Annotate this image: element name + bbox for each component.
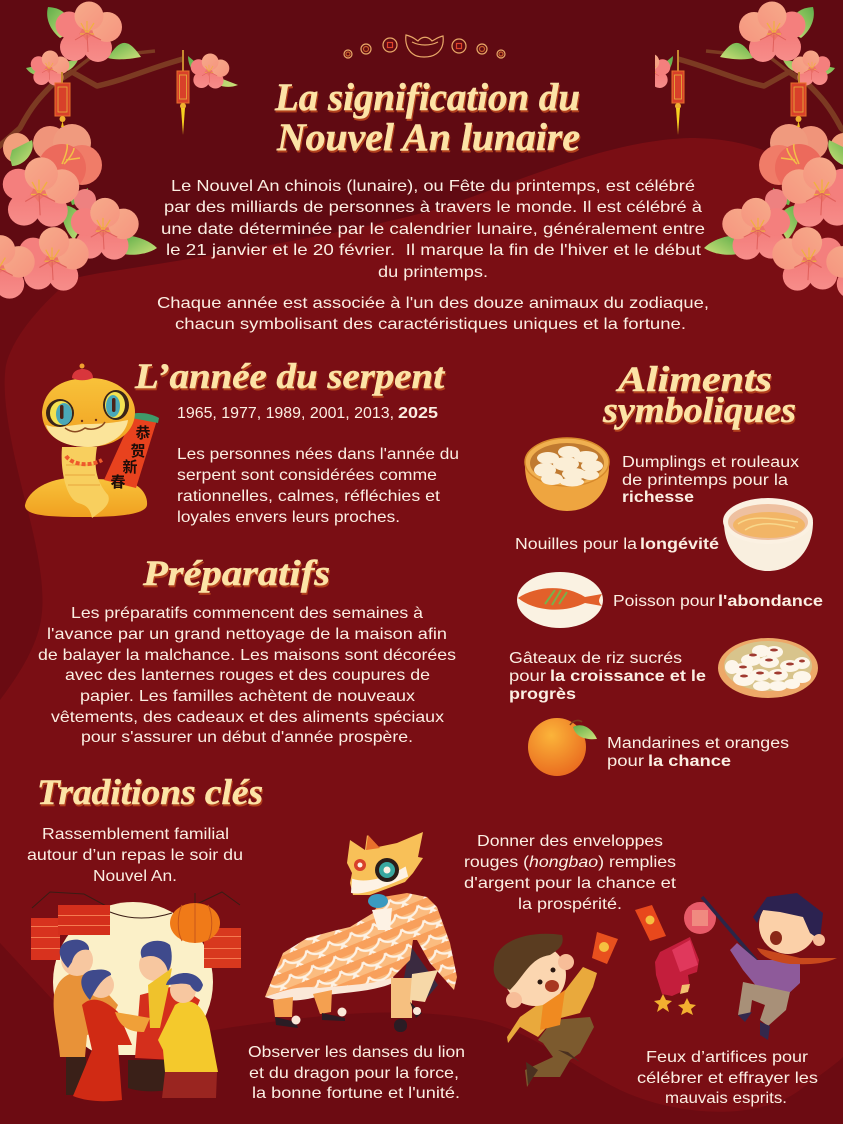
title: Nouvel An lunaire <box>276 116 580 159</box>
food text: fish: Poisson pour <box>613 593 715 610</box>
tradition text: red envelopes: Donner des enveloppes <box>477 833 663 850</box>
tradition text: family gathering: autour d’un repas le soir du <box>27 847 243 864</box>
heading: year of the snake: L’année du serpent <box>134 356 445 396</box>
preparations text: papier. Les familles achètent de nouveaux <box>80 688 415 705</box>
tradition text: fireworks <box>637 1049 818 1107</box>
heading: preparations: Préparatifs <box>142 553 330 593</box>
icon: fish on plate <box>517 572 603 628</box>
food text: rice cakes: pour <box>509 668 546 685</box>
tradition text: red envelopes <box>464 833 677 913</box>
icon: gold ingot and coins <box>344 35 505 58</box>
tradition text: family gathering <box>27 826 243 885</box>
tradition text: red envelopes: la prospérité. <box>518 896 622 913</box>
tradition text: fireworks: mauvais esprits. <box>665 1090 787 1107</box>
food tray <box>115 1012 150 1032</box>
heading: symbolic foods: symboliques <box>602 390 796 430</box>
food text: dumplings: richesse <box>622 489 694 506</box>
snake text: loyales envers leurs proches. <box>177 509 400 526</box>
snake text <box>177 405 459 526</box>
father <box>54 972 118 1057</box>
snake text: 2025 <box>398 405 438 422</box>
preparations text: pour s'assurer un début d'année prospère. <box>81 729 413 746</box>
tradition text: lion dance <box>248 1044 465 1102</box>
tradition text: family gathering: Rassemblement familial <box>42 826 229 843</box>
tradition text: fireworks: Feux d’artifices pour <box>646 1049 808 1066</box>
intro text: le 21 janvier et le 20 février. Il marque la fin de l'hiver et le début <box>166 242 702 259</box>
tradition text: fireworks: célébrer et effrayer les <box>637 1070 818 1087</box>
tradition text: red envelopes: d'argent pour la chance et <box>464 875 677 892</box>
intro text <box>157 178 709 333</box>
woman in yellow <box>158 1001 218 1072</box>
icon: snake mascot <box>25 364 159 518</box>
illustration: lion dance <box>265 832 457 1032</box>
tradition text: family gathering: Nouvel An. <box>93 868 177 885</box>
intro text: une date déterminée par le calendrier lunaire, généralement entre <box>161 221 705 238</box>
food text: rice cakes: progrès <box>509 686 576 703</box>
icon: snake mascot: 春 <box>110 471 126 492</box>
food text: fish <box>613 593 823 610</box>
icon: rice cakes plate <box>718 638 818 698</box>
snake text: 1965, 1977, 1989, 2001, 2013, <box>177 405 394 422</box>
food text: oranges <box>607 735 789 770</box>
food text: dumplings <box>622 454 799 506</box>
intro text: par des milliards de personnes à travers le monde. Il est célébré à <box>164 199 702 216</box>
icon: snake mascot: 恭 <box>135 422 151 443</box>
intro text: chacun symbolisant des caractéristiques uniques et la fortune. <box>175 316 686 333</box>
food text: oranges: Mandarines et oranges <box>607 735 789 752</box>
icon: noodle bowl <box>723 498 813 571</box>
tradition text: lion dance: la bonne fortune et l'unité. <box>252 1085 460 1102</box>
tall man <box>135 985 200 1060</box>
tradition text: lion dance: et du dragon pour la force, <box>249 1065 459 1082</box>
title <box>274 76 580 159</box>
food text: noodles <box>515 536 719 553</box>
preparations text: avec des lanternes rouges et des coupures de <box>65 667 430 684</box>
preparations text <box>38 605 456 746</box>
icon: snake mascot: 新 <box>122 456 138 477</box>
illustration: family with lanterns <box>31 892 241 1101</box>
preparations text: l'avance par un grand nettoyage de la maison afin <box>47 626 447 643</box>
preparations text: de balayer la malchance. Les maisons sont décorées <box>38 647 456 664</box>
preparations text: Les préparatifs commencent des semaines à <box>71 605 423 622</box>
food text: rice cakes: Gâteaux de riz sucrés <box>509 650 682 667</box>
food text: rice cakes <box>509 650 706 703</box>
illustration: child with red envelope <box>494 932 618 1087</box>
food text: noodles: longévité <box>640 536 719 553</box>
intro text: Chaque année est associée à l'un des douze animaux du zodiaque, <box>157 295 709 312</box>
woman in red <box>73 1000 132 1101</box>
food text: oranges: la chance <box>648 753 731 770</box>
preparations text: vêtements, des cadeaux et des aliments spéciaux <box>51 709 444 726</box>
intro text: Le Nouvel An chinois (lunaire), ou Fête du printemps, est célébré <box>171 178 695 195</box>
food text: dumplings: de printemps pour la <box>622 472 788 489</box>
heading: symbolic foods <box>602 359 796 430</box>
tradition text: lion dance: Observer les danses du lion <box>248 1044 465 1061</box>
icon: snake mascot: 贺 <box>130 440 146 461</box>
food text: dumplings: Dumplings et rouleaux <box>622 454 799 471</box>
food text: oranges: pour <box>607 753 644 770</box>
tradition text: red envelopes: rouges ( hongbao ) remplies <box>464 854 676 871</box>
snake text: serpent sont considérées comme <box>177 467 437 484</box>
title: La signification du <box>274 76 580 119</box>
food text: noodles: Nouilles pour la <box>515 536 637 553</box>
food text: fish: l'abondance <box>718 593 823 610</box>
food text: rice cakes: la croissance et le <box>550 668 706 685</box>
icon: dumpling basket <box>525 438 609 511</box>
illustration: firecrackers and child <box>635 893 837 1040</box>
heading: key traditions: Traditions clés <box>37 772 263 812</box>
snake text: rationnelles, calmes, réfléchies et <box>177 488 441 505</box>
blossom branch: left <box>0 2 238 299</box>
icon: orange <box>528 718 597 776</box>
heading: symbolic foods: Aliments <box>616 359 772 399</box>
snake text: Les personnes nées dans l'année du <box>177 446 459 463</box>
intro text: du printemps. <box>378 264 488 281</box>
blossom branch: right <box>655 2 843 296</box>
